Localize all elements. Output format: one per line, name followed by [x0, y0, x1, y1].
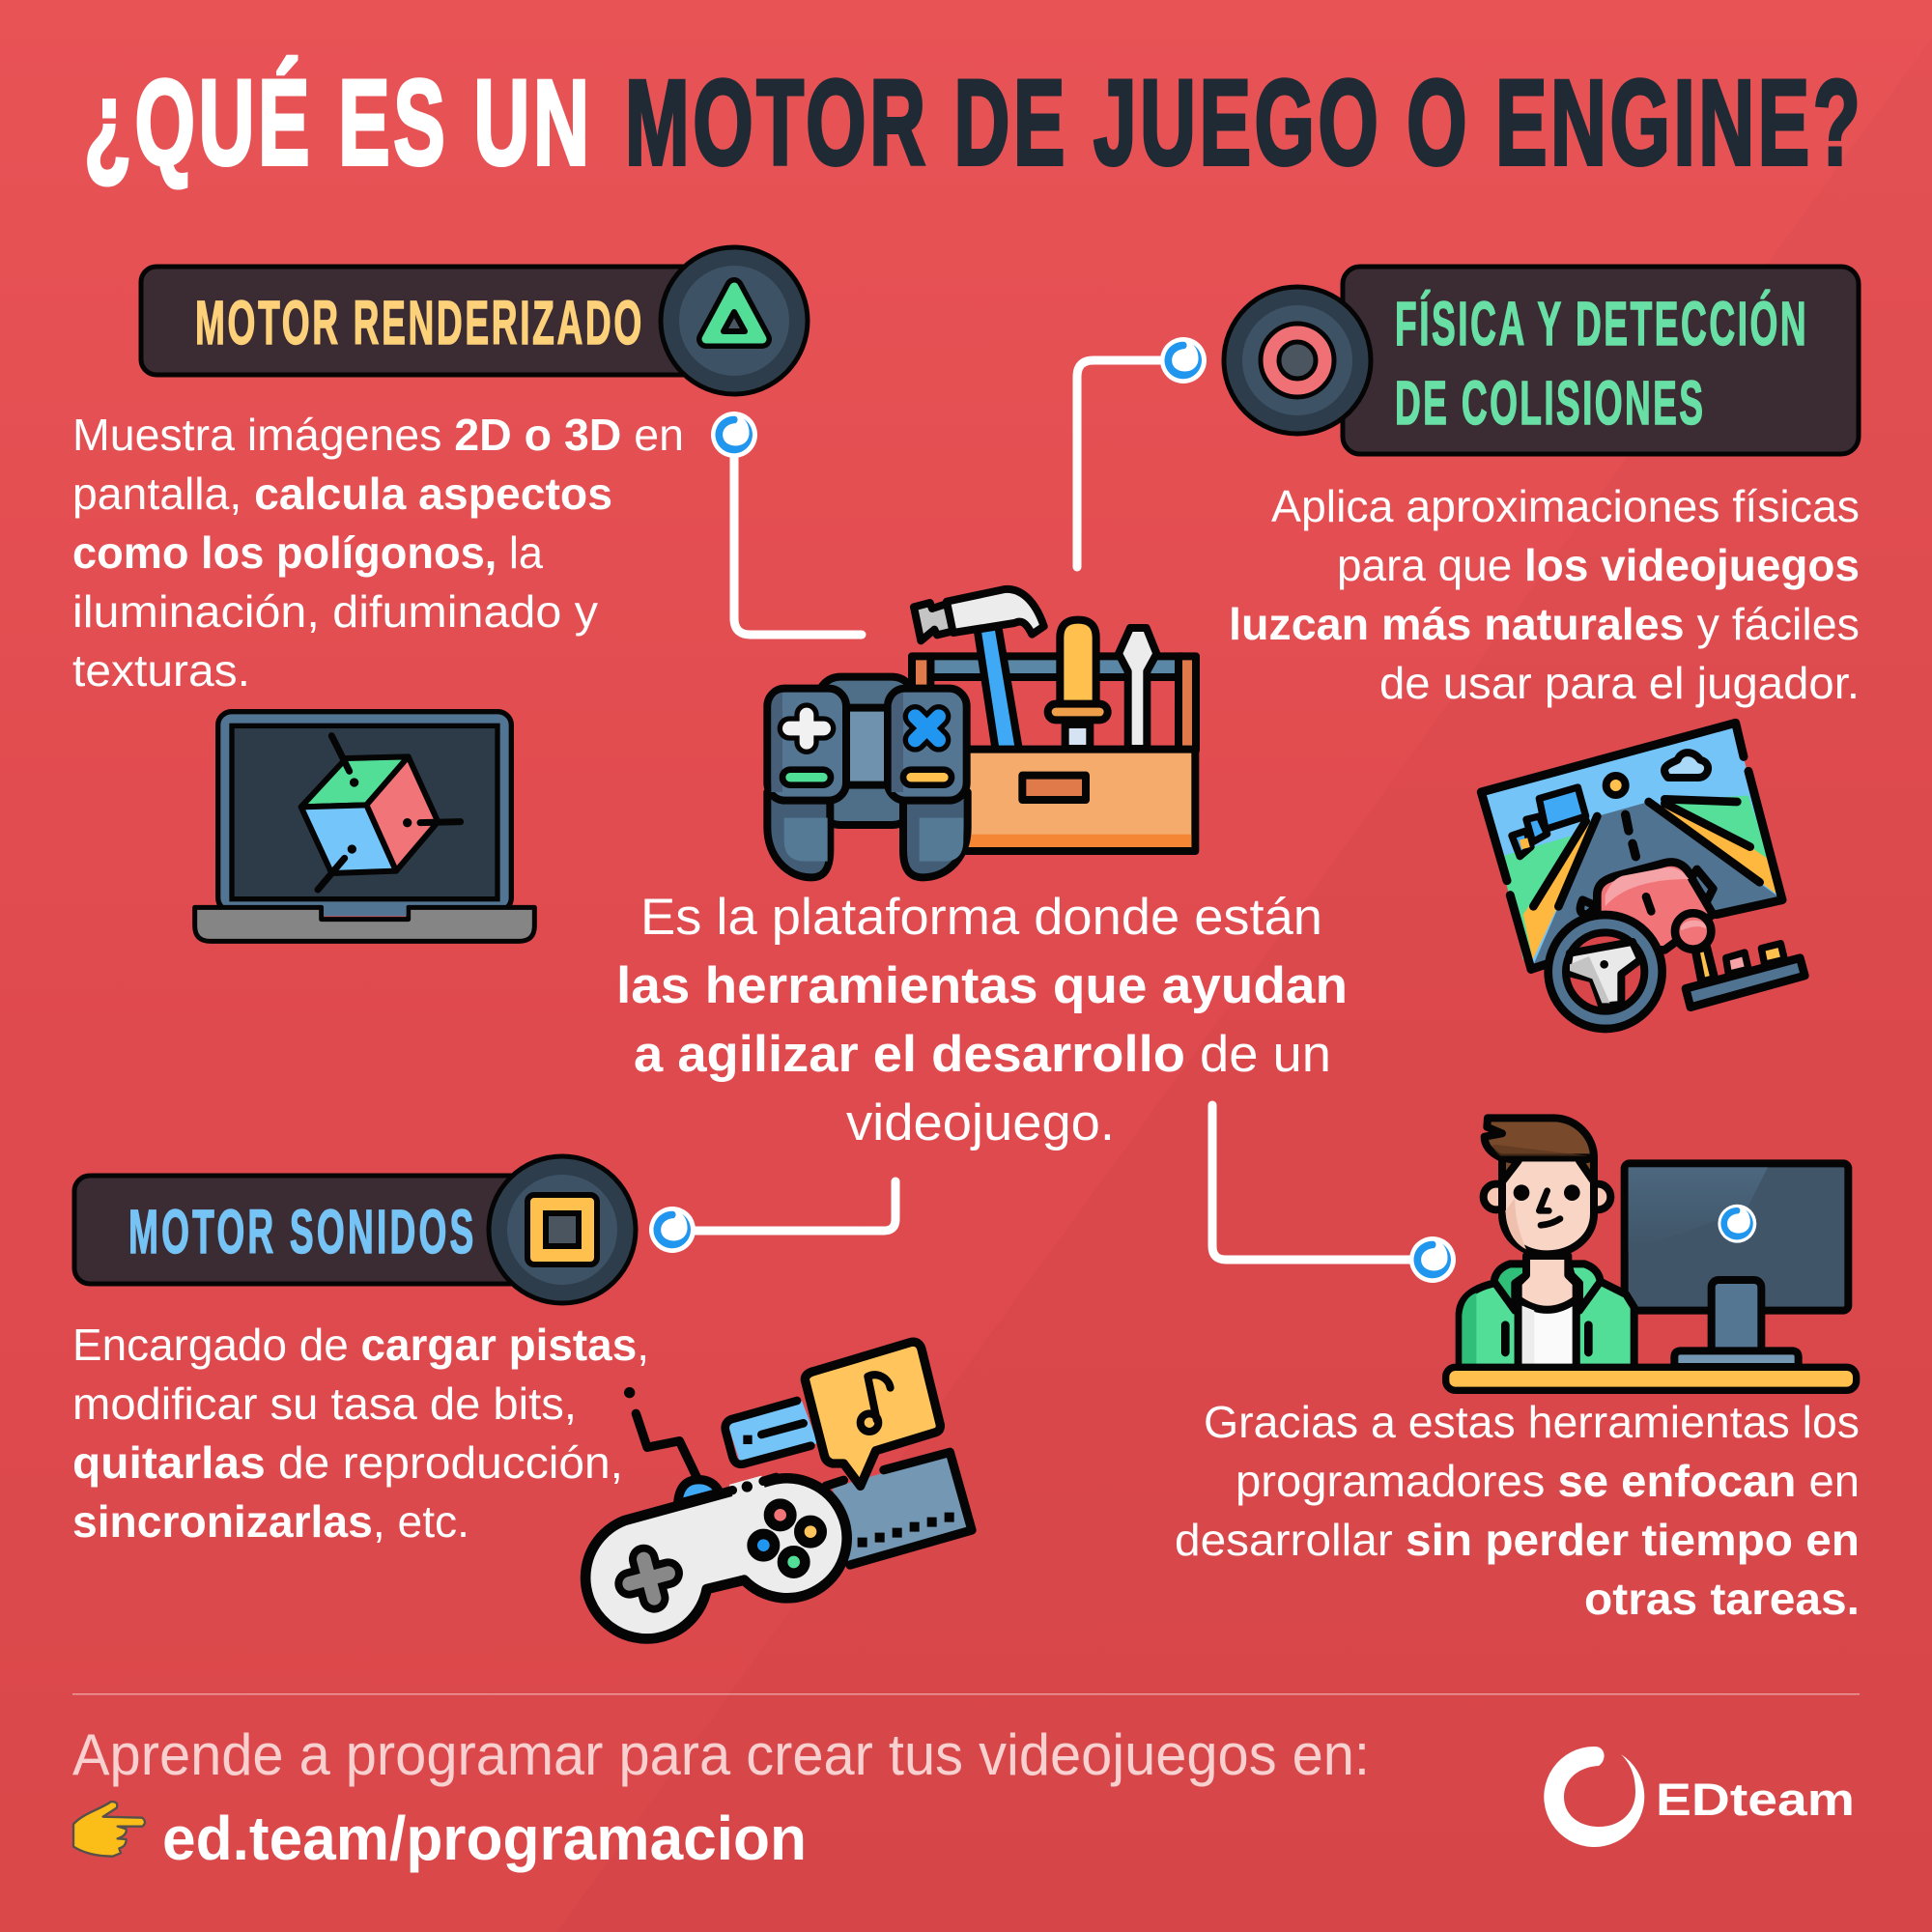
connector: sound to center [672, 1181, 895, 1231]
text block: motor renderizado description: iluminación, difuminado y [72, 586, 598, 637]
text block: motor sonidos description: modificar su tasa de bits, [72, 1378, 577, 1429]
text block: developer description: desarrollar sin perder tiempo en [1175, 1515, 1860, 1565]
d-pad [624, 1554, 673, 1604]
film strip [826, 1452, 972, 1565]
connector: center to developer [1212, 1105, 1433, 1260]
text block: developer description: Gracias a estas herramientas los [1204, 1397, 1860, 1447]
connector: physics to tools [1077, 360, 1183, 567]
plus button [789, 715, 824, 742]
gamepad body [585, 1477, 847, 1638]
desk [1446, 1367, 1857, 1390]
text block: física description [1229, 481, 1860, 708]
hammer [914, 589, 1044, 751]
icon: music and gamepad [585, 1342, 972, 1638]
flat screwdriver [1119, 628, 1156, 749]
steering wheel [1548, 915, 1662, 1029]
title [84, 56, 1861, 190]
yellow screwdriver [1048, 620, 1108, 749]
text block: física description: luzcan más naturales y fáciles [1229, 599, 1860, 649]
badge label: motor renderizado: MOTOR RENDERIZADO [195, 290, 641, 358]
panel: física badge [1224, 267, 1859, 454]
text block: física description: de usar para el jugador. [1379, 658, 1860, 708]
icon: circle button [1224, 287, 1371, 434]
usb stick [725, 1401, 818, 1464]
person [1460, 1118, 1634, 1369]
icon: toolbox and controller [767, 589, 1196, 877]
text block: developer description: programadores se enfocan en [1236, 1456, 1860, 1506]
logo: EDteam: EDteam [1656, 1774, 1855, 1825]
title: ¿QUÉ ES UN [84, 56, 589, 190]
text block: central description: Es la plataforma donde están [640, 889, 1322, 946]
music bubble [805, 1342, 940, 1486]
pin: sound [649, 1207, 696, 1253]
text block: motor renderizado description: pantalla, calcula aspectos [72, 469, 612, 519]
text block: motor renderizado description: como los polígonos, la [72, 527, 543, 578]
panel: motor renderizado badge [141, 247, 808, 394]
icon: laptop with 3D cube [195, 712, 534, 941]
text block: motor sonidos description [72, 1320, 649, 1547]
controller [767, 677, 968, 877]
icon: racing simulator [1481, 723, 1804, 1029]
connector: render to tools [734, 435, 862, 635]
footer url: ed.team/programacion [162, 1804, 807, 1873]
logo: EDteam [1544, 1747, 1855, 1847]
text block: motor renderizado description: texturas. [72, 645, 250, 696]
text block: developer description: otras tareas. [1584, 1574, 1860, 1624]
pin: developer [1409, 1236, 1456, 1283]
text block: motor sonidos description: sincronizarlas, etc. [72, 1496, 469, 1547]
icon: triangle button [661, 247, 808, 394]
action buttons [769, 1504, 791, 1526]
icon: developer at monitor [1446, 1118, 1857, 1390]
badge label: motor sonidos: MOTOR SONIDOS [128, 1199, 473, 1267]
text block: física description: para que los videojuegos [1337, 540, 1860, 590]
minus buttons [782, 770, 831, 785]
icon: square button [489, 1156, 636, 1303]
text block: central description: las herramientas que ayudan [616, 957, 1348, 1014]
footer call to action: Aprende a programar para crear tus videojuegos en: [72, 1722, 1370, 1787]
car [1580, 862, 1713, 950]
antenna [624, 1387, 720, 1504]
toolbox body [963, 750, 1195, 851]
text block: central description: a agilizar el desarrollo de un [634, 1026, 1331, 1083]
badge label: física y detección de colisiones: DE COLISIONES [1395, 370, 1703, 439]
text block: motor sonidos description: quitarlas de reproducción, [72, 1437, 623, 1488]
monitor [1625, 1163, 1848, 1367]
monitor pin [1718, 1205, 1756, 1243]
game screen [1481, 723, 1782, 969]
text block: central description: videojuego. [846, 1094, 1115, 1151]
text block: motor renderizado description: Muestra imágenes 2D o 3D en [72, 410, 684, 460]
cross button [915, 717, 939, 740]
panel: motor sonidos badge [74, 1156, 636, 1303]
text block: developer description [1175, 1397, 1860, 1624]
text block: central description [616, 889, 1348, 1151]
text block: motor renderizado description [72, 410, 684, 696]
text block: física description: Aplica aproximaciones físicas [1271, 481, 1860, 531]
badge label: física y detección de colisiones: FÍSICA Y DETECCIÓN [1395, 291, 1806, 359]
text block: motor sonidos description: Encargado de cargar pistas, [72, 1320, 649, 1370]
badge label: física y detección de colisiones [1395, 291, 1806, 439]
gear shift [1675, 913, 1804, 1008]
toolbox back frame [912, 656, 1196, 753]
title: MOTOR DE JUEGO O ENGINE? [625, 56, 1861, 190]
pin: render [711, 412, 757, 458]
icon: pointing hand [73, 1802, 145, 1857]
3D cube [301, 736, 461, 890]
pin: physics [1160, 337, 1207, 384]
